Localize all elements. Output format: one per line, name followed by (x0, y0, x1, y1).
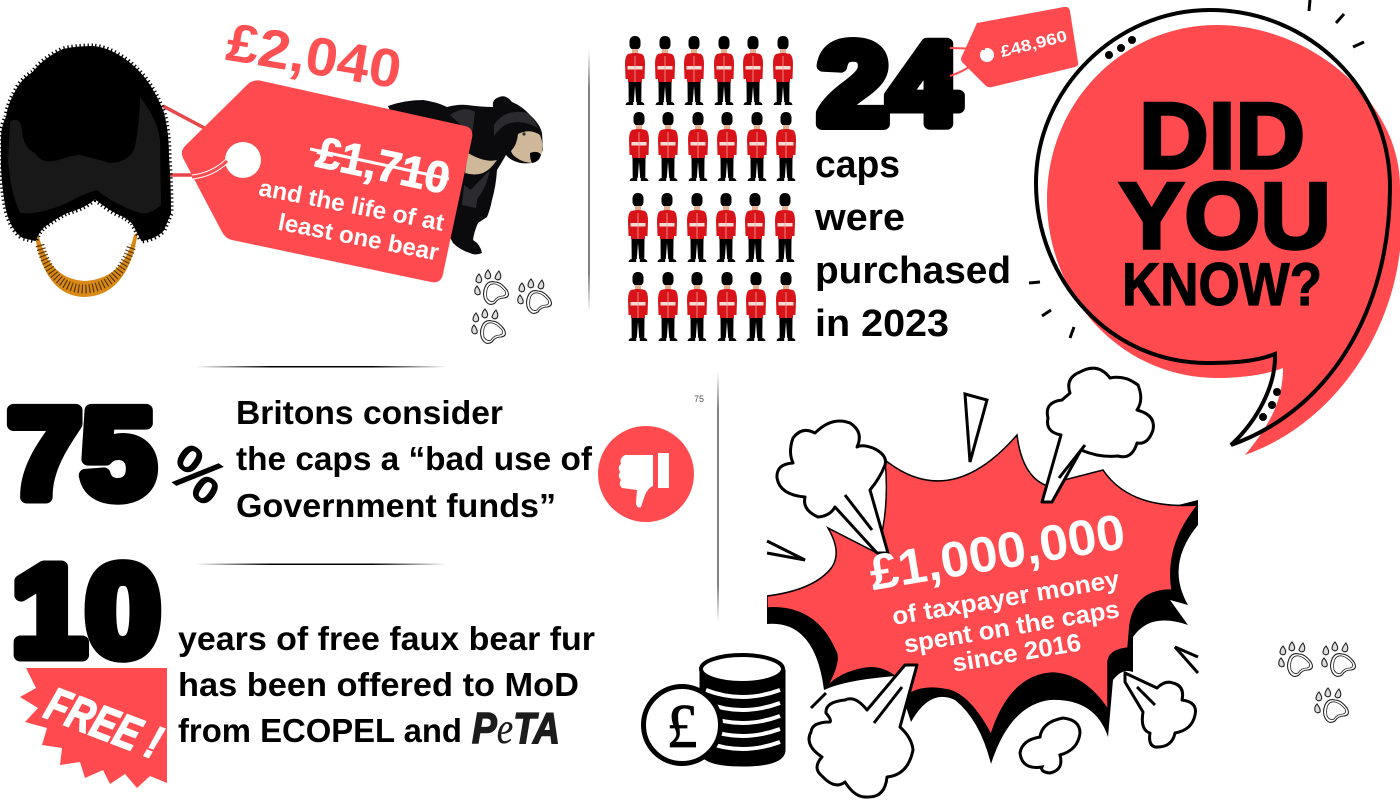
small price tag: total (950, 7, 1078, 87)
text: Britons consider (236, 394, 593, 524)
burst text line 3: since 2016 (950, 629, 1083, 678)
icon: bearskin cap (2, 47, 170, 240)
decorative dots (1105, 36, 1281, 421)
icon: paw prints lower right (1279, 642, 1355, 722)
small label 75: 75 (694, 394, 704, 404)
icon: bear (388, 96, 543, 254)
price tag shape (182, 80, 472, 282)
speed lines left (767, 541, 805, 560)
pound sign: £ (666, 693, 698, 761)
speech bubble: did you know (1029, 0, 1400, 455)
speed lines right (1175, 647, 1198, 673)
tag text line 2: least one bear (276, 209, 441, 266)
heading YOU: YOU (1119, 163, 1331, 268)
text: caps were purchased in 2023: were (814, 197, 905, 239)
icon: paw prints near bear (472, 270, 551, 343)
badge text: FREE ! (38, 676, 169, 769)
tag amount: £48,960 (999, 28, 1069, 61)
smoke cloud top right (1042, 368, 1153, 502)
text: caps were purchased in 2023: purchased (815, 250, 1011, 292)
text: caps were purchased in 2023: caps (815, 144, 900, 186)
spike top (965, 394, 987, 462)
tag string through hole (192, 161, 227, 177)
small smoke puff (1020, 718, 1080, 773)
text: caps were purchased in 2023: in 2023 (815, 303, 949, 345)
text: caps were purchased in 2023 (814, 144, 1011, 345)
text: Britons consider: Government funds” (236, 487, 556, 524)
icon: chin strap (35, 232, 138, 297)
logo: PETA: PeTA (472, 704, 560, 753)
stat: 75: 75 (8, 383, 155, 524)
pictogram: 24 guards (625, 36, 796, 341)
text: Britons consider: Britons consider (236, 394, 503, 431)
burst text line 1: of taxpayer money (890, 565, 1122, 631)
smoke cloud bottom right (1125, 673, 1195, 747)
icon: thumbs down (598, 426, 694, 522)
burst amount: £1,000,000 (865, 503, 1129, 601)
explosion burst (767, 368, 1198, 797)
icon: coin stack (644, 655, 785, 766)
percent sign: % (155, 431, 240, 519)
stat: 24: 24 (818, 19, 959, 149)
smoke cloud bottom left (809, 665, 917, 797)
pound coin (644, 686, 720, 764)
burst shadow (767, 500, 1198, 764)
heading KNOW?: KNOW? (1122, 251, 1322, 318)
bubble outline (1036, 10, 1390, 445)
text: years of free faux bear fur: from ECOPEL and (178, 712, 462, 749)
bubble red fill (1047, 25, 1400, 455)
burst dashes (1029, 0, 1364, 338)
text: years of free faux bear fur: years of free faux bear fur (178, 620, 595, 657)
tag text line 1: and the life of at (257, 174, 446, 237)
badge: free (20, 668, 169, 788)
stat: 10: 10 (12, 540, 160, 683)
panel: cap price tag (2, 12, 543, 297)
strikethrough (310, 149, 449, 179)
heading DID: DID (1139, 83, 1305, 188)
text: years of free faux bear fur: has been offered to MoD (178, 666, 579, 703)
old price: £1,710 (312, 128, 454, 204)
burst red fill (767, 435, 1198, 735)
text: Britons consider: the caps a “bad use of (236, 440, 593, 477)
new price: £2,040 (222, 12, 406, 100)
burst text line 2: spent on the caps (902, 595, 1121, 659)
text: years of free faux bear fur (178, 620, 595, 749)
smoke cloud top left (777, 421, 888, 553)
price string behind tag (163, 106, 210, 175)
